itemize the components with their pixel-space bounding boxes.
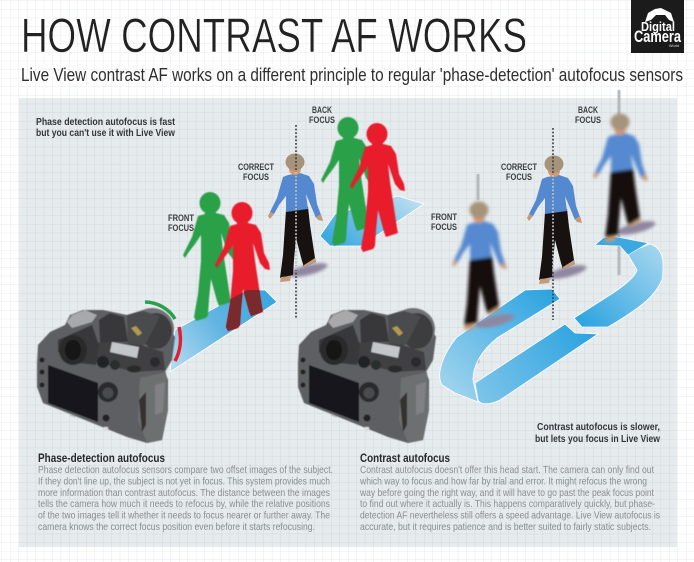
- caption: contrast: [535, 422, 660, 445]
- figure: correct focus: [268, 154, 323, 282]
- label: back focus: [575, 105, 601, 125]
- text block: phase-detection autofocus: Phase-detection autofocus: [38, 451, 165, 465]
- text block: phase-detection autofocus: of the two images tell it whether it needs to focus nearer or further away. The: [38, 510, 330, 522]
- label: back focus: FOCUS: [309, 115, 335, 125]
- text block: phase-detection autofocus: If they don't line up, the subject is not yet in focus. This system provides much: [38, 476, 330, 488]
- label: back focus: BACK: [578, 105, 598, 115]
- focus ribbon: top tip: [595, 237, 648, 255]
- camera: phase-detection: [37, 308, 175, 443]
- figure: front focus green: [183, 192, 238, 321]
- text block: phase-detection autofocus: camera knows the correct focus position even before it starts refocusing.: [38, 521, 315, 533]
- shadow: correct focus: [287, 260, 329, 280]
- label: correct focus: FOCUS: [243, 172, 269, 182]
- dotted focus line: [295, 125, 297, 318]
- label: back focus: FOCUS: [575, 115, 601, 125]
- text block: phase-detection autofocus: [38, 451, 333, 533]
- logo: Digital Camera World: World: [669, 43, 679, 48]
- label: correct focus: [238, 162, 274, 182]
- camera: contrast: [298, 308, 436, 443]
- dotted focus line: [552, 128, 554, 320]
- light beam: far: [320, 196, 424, 246]
- label: back focus: BACK: [312, 105, 332, 115]
- figure: correct focus: [527, 156, 582, 284]
- label: correct focus: FOCUS: [506, 172, 532, 182]
- grey focus lines, out of focus: [478, 90, 619, 363]
- figure: back focus, blurred: [593, 114, 648, 242]
- diagram: phase-detection autofocus: [145, 105, 424, 372]
- label: back focus: [309, 105, 335, 125]
- red figure legs over beam: [226, 290, 263, 331]
- label: front focus: [431, 212, 457, 232]
- label: correct focus: CORRECT: [238, 162, 274, 172]
- text block: phase-detection autofocus: Phase detection autofocus sensors compare two offset images of the subject.: [38, 464, 333, 476]
- caption: contrast: Contrast autofocus is slower,: [537, 422, 660, 433]
- shadows: [474, 311, 516, 331]
- focus ribbon: right loop: [574, 244, 663, 327]
- green focus arc: [145, 302, 175, 319]
- caption: contrast: but lets you focus in Live View: [535, 434, 660, 445]
- title: HOW CONTRAST AF WORKS: [21, 10, 527, 63]
- figure: front focus, blurred: [452, 202, 507, 330]
- figure: back focus green: [321, 117, 376, 246]
- red focus arc: [175, 327, 180, 361]
- label: correct focus: [501, 162, 537, 182]
- label: front focus: FOCUS: [431, 222, 457, 232]
- text block: contrast autofocus: Contrast autofocus: [360, 451, 450, 465]
- caption: phase detection: [36, 117, 176, 139]
- figure: back focus red: [350, 123, 405, 252]
- label: front focus: FRONT: [168, 213, 194, 223]
- text block: phase-detection autofocus: more information than contrast autofocus. The distance between the images: [38, 487, 330, 499]
- diagram: contrast autofocus: [431, 90, 663, 404]
- focus ribbon: left loop: [440, 289, 560, 402]
- text block: phase-detection autofocus: tells the camera how much it needs to refocus by, while the relative positions: [38, 498, 330, 510]
- logo: Digital Camera World: Digital: [641, 19, 675, 34]
- light beam: near: [170, 290, 277, 372]
- caption: phase detection: but you can't use it with Live View: [36, 128, 175, 139]
- caption: phase detection: Phase detection autofocus is fast: [36, 117, 176, 128]
- focus ribbon: lower strip: [475, 324, 598, 404]
- label: correct focus: CORRECT: [501, 162, 537, 172]
- figure: front focus red: [215, 202, 270, 331]
- background panel: [19, 98, 677, 547]
- label: front focus: FOCUS: [168, 223, 194, 233]
- text block: contrast autofocus: [359, 451, 660, 533]
- label: front focus: [168, 213, 194, 233]
- label: front focus: FRONT: [431, 212, 457, 222]
- logo: Digital Camera World: [631, 0, 684, 53]
